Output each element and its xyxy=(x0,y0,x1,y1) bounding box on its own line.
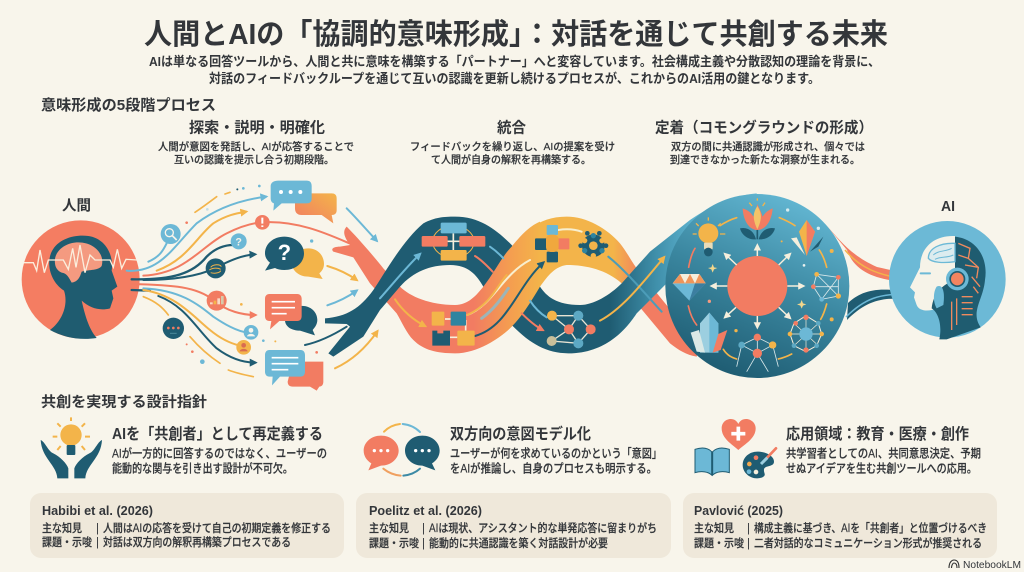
principle 2 text: ユーザーが何を求めているのかという「意図」 xyxy=(450,446,662,460)
icon: diamond xyxy=(673,274,706,301)
panel: Poelitz card: Poelitz et al. (2026) xyxy=(369,503,482,518)
intro text: AIは単なる回答ツールから、人間と共に意味を構築する「パートナー」へと変容しています。社会構成主義や分散認知の理論を背景に、 xyxy=(149,54,880,69)
icon: magnifier bubble xyxy=(161,224,181,244)
panel: Habibi card: | xyxy=(96,537,99,549)
icon: application domains xyxy=(695,419,776,478)
panel: AI head xyxy=(889,221,1006,339)
panel: Poelitz card: | xyxy=(422,538,425,550)
icon: cross blocks xyxy=(535,225,569,262)
panel: Pavlović card: 構成主義に基づき、AIを「共創者」と位置づけるべき xyxy=(754,521,987,535)
panel: Poelitz card: 課題・示唆 xyxy=(369,536,419,550)
stage 1 text: 人間が意図を発話し、AIが応答することで xyxy=(158,140,354,153)
central circle xyxy=(727,256,787,316)
icon: flowchart xyxy=(422,223,485,261)
icon: person yellow xyxy=(236,340,251,355)
stage 1 text: 互いの認識を提示し合う初期段階。 xyxy=(174,153,334,166)
radiating arrows xyxy=(712,245,803,327)
panel: Poelitz card: AIは現状、アシスタント的な単発応答に留まりがち xyxy=(429,521,657,535)
ribbon: AI side strand xyxy=(847,290,907,320)
icon: exclamation xyxy=(255,215,270,230)
icon: hands and bulb xyxy=(41,417,102,478)
heading: design principles: 共創を実現する設計指針 xyxy=(41,393,208,411)
icon: lightbulb xyxy=(693,217,725,256)
principle 3 text: 共学習者としてのAI、共同意思決定、予期 xyxy=(786,446,981,460)
icon: heart xyxy=(722,419,756,450)
wave decorations: arrows and icons xyxy=(380,223,664,348)
stage 3 text: 定着（コモングラウンドの形成） xyxy=(655,118,873,136)
bubble: blue lines with coral xyxy=(265,350,323,391)
icon: tulip xyxy=(740,204,775,239)
icon: palette xyxy=(743,452,774,478)
panel: Poelitz card: 能動的に共通認識を築く対話設計が必要 xyxy=(429,536,608,550)
stage 1 text xyxy=(158,118,354,166)
icon: crystal xyxy=(791,220,823,256)
stage 2 text: 統合 xyxy=(497,120,526,136)
stage 2 text xyxy=(410,120,615,166)
bubble: question teal with yellow xyxy=(265,237,324,279)
panel: Habibi card: 主な知見 xyxy=(42,521,82,535)
icon: puzzle pieces xyxy=(432,312,475,346)
stage 3 text xyxy=(655,118,873,166)
panel: Habibi card: Habibi et al. (2026) xyxy=(42,503,153,518)
principle 3 text xyxy=(786,424,981,476)
intro text: 対話のフィードバックループを通じて互いの認識を更新し続けるプロセスが、これからのAI活用の鍵となります。 xyxy=(209,71,820,86)
ribbon: human side strand to AI xyxy=(826,225,906,282)
dashed arcs xyxy=(688,218,827,359)
panel: Habibi card: 対話は双方向の解釈再構築プロセスである xyxy=(103,535,291,549)
icon: brainwave xyxy=(24,245,137,273)
icon: network bottom xyxy=(737,334,778,372)
icon: loop circle xyxy=(206,258,226,278)
label: human: 人間 xyxy=(62,198,91,214)
ribbons: strands into AI xyxy=(826,225,907,320)
bubble: coral lines with teal xyxy=(265,294,317,335)
label: AI: AI xyxy=(941,199,955,215)
icon: brain xyxy=(55,242,102,283)
panel: Poelitz card xyxy=(356,493,671,558)
principle 2 text: 双方向の意図モデル化 xyxy=(450,424,591,443)
icon: dialogue bubbles xyxy=(364,424,440,476)
principle 1 text: AIを「共創者」として再定義する xyxy=(112,424,323,443)
icon: ear core xyxy=(946,268,969,290)
arrows on ribbons xyxy=(380,229,664,336)
icon: flower molecule xyxy=(578,231,608,258)
ribbon: human strand (coral to yellow) xyxy=(332,217,700,357)
principle 1 text: AIが一方的に回答するのではなく、ユーザーの xyxy=(112,446,327,460)
panel: Habibi card xyxy=(30,493,344,558)
icon: circuit lines xyxy=(958,243,980,293)
icon: molecule xyxy=(788,315,824,353)
principle 3 text: 応用領域：教育・医療・創作 xyxy=(786,424,969,443)
icon: brain lines xyxy=(928,243,955,263)
icon: AI face xyxy=(910,236,955,311)
panel: Pavlović card: 主な知見 xyxy=(694,521,734,535)
sphere xyxy=(665,194,849,378)
icon: person blue xyxy=(244,325,258,340)
panel: human head xyxy=(22,220,140,339)
panel: Pavlović card: | xyxy=(747,538,750,550)
stage 2 text: フィードバックを繰り返し、AIの提案を受け xyxy=(410,140,615,153)
panel: Pavlović card: Pavlović (2025) xyxy=(694,503,783,518)
panel: Pavlović card: 二者対話的なコミュニケーション形式が推奨される xyxy=(754,536,982,550)
panel: Pavlović card: 課題・示唆 xyxy=(694,536,744,550)
ribbon: crossing overlay xyxy=(483,222,540,341)
panel: Poelitz card: | xyxy=(422,523,425,535)
icon: silhouette xyxy=(49,236,117,339)
human stream: arrows, bubbles and head xyxy=(22,181,377,391)
icon: dots circle xyxy=(163,318,184,339)
principle 2 text xyxy=(450,424,662,476)
ribbons: intertwined wave xyxy=(325,193,757,357)
heading: process: 意味形成の5段階プロセス xyxy=(41,96,216,114)
intro text xyxy=(149,54,880,86)
icon: network right xyxy=(811,272,841,302)
panel: Habibi card: | xyxy=(96,523,99,535)
icon: chart circle xyxy=(207,291,227,311)
principle 1 text xyxy=(112,424,327,476)
title: 人間とAIの「協調的意味形成」：対話を通じて共創する未来 xyxy=(144,18,888,51)
principle 1 text: 能動的な関与を引き出す設計が不可欠。 xyxy=(112,460,293,476)
principle 2 text: をAIが推論し、自身のプロセスも明示する。 xyxy=(450,460,657,476)
bubble: blue dots with orange xyxy=(271,181,337,223)
icon: AI circuitry head xyxy=(932,237,986,339)
principle 3 text: せぬアイデアを生む共創ツールへの応用。 xyxy=(786,460,977,476)
sparkles and dots xyxy=(708,198,834,332)
stage 3 text: 到達できなかった新たな洞察が生まれる。 xyxy=(670,153,860,166)
panel: Poelitz card: 主な知見 xyxy=(369,521,409,535)
panel: shared understanding sphere xyxy=(665,194,849,378)
icon: node network xyxy=(547,311,596,348)
icon: question small: ? xyxy=(235,236,242,248)
icon: question small xyxy=(231,233,247,249)
panel: Habibi card: 人間はAIの応答を受けて自己の初期定義を修正する xyxy=(103,521,331,535)
small dots xyxy=(185,185,318,364)
ribbon: AI strand (teal to blue) xyxy=(325,193,757,357)
stage 1 text: 探索・説明・明確化 xyxy=(189,118,325,136)
panel: Pavlović card xyxy=(683,493,997,558)
bubble: question teal with yellow: ? xyxy=(278,240,291,265)
stage 3 text: 双方の間に共通認識が形成され、個々では xyxy=(671,140,865,153)
NotebookLM logo: NotebookLM xyxy=(963,559,1021,571)
panel: Habibi card: 課題・示唆 xyxy=(42,535,92,549)
stage 2 text: て人間が自身の解釈を再構築する。 xyxy=(431,153,591,166)
panel: Pavlović card: | xyxy=(747,523,750,535)
icon: book xyxy=(695,448,729,475)
icon: crystal cluster xyxy=(691,313,727,353)
flow lines xyxy=(127,192,377,377)
